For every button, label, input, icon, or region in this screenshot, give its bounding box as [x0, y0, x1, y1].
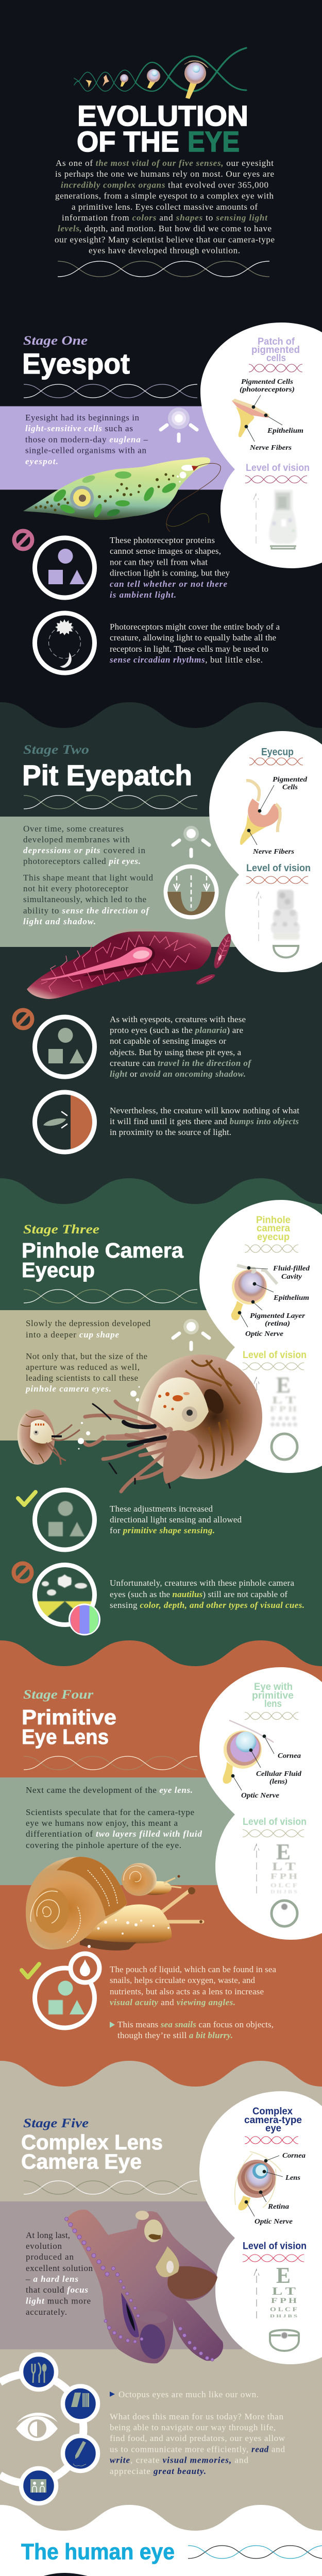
diagram labels: Nerve Fibers: [252, 848, 294, 855]
stage heading: Pit Eyepatch: [22, 759, 192, 791]
text: photoreceptor proteins: nor can they tell from what: [110, 557, 208, 567]
band text: single-celled organisms with an: [25, 445, 146, 455]
diagram labels: (retina): [265, 1319, 290, 1327]
band text: light much more: [26, 2296, 91, 2306]
bubble: eye diagram: Pinhole: [256, 1215, 291, 1226]
text: proto eyes: [110, 1014, 252, 1079]
icon: planarian avoiding shadow: [35, 1092, 95, 1152]
level of vision: D H J B S: [270, 1889, 297, 1894]
band: [0, 1310, 242, 1440]
level of vision: L T: [272, 2285, 296, 2297]
band text: Eyesight had its beginnings in: [25, 413, 139, 422]
bubble title: [251, 336, 300, 364]
stage heading: Complex Lens: [21, 2130, 163, 2154]
band: [0, 2201, 242, 2349]
band text: into a deeper cup shape: [26, 1330, 119, 1340]
intro text: eyes have developed through evolution.: [89, 246, 240, 256]
diagram labels: [245, 1264, 310, 1337]
illustration: human eye: [0, 2573, 151, 2576]
panel: stage one: [0, 323, 322, 673]
band text: eye we humans now enjoy, this meant a: [26, 1818, 178, 1828]
bubble: eye diagram: [199, 1200, 322, 1473]
band text: excellent solution: [26, 2263, 93, 2273]
text: proto eyes: As with eyespots, creatures with these: [110, 1014, 246, 1024]
text: what this means: What does this mean for us today? More than: [110, 2412, 283, 2421]
text: circadian: sense circadian rhythms, but little else.: [109, 655, 263, 665]
stage heading: Eyespot: [22, 347, 130, 380]
text: adjustments: directional light sensing and allowed: [110, 1515, 242, 1524]
band text: [25, 2230, 93, 2317]
level of vision: L T: [272, 1395, 296, 1406]
band text: leading scientists to call these: [26, 1373, 138, 1383]
text: pouch of liquid: nutrients, but also acts as a lens to increase: [110, 1987, 264, 1996]
icon: blurry shapes: [35, 1490, 95, 1550]
big snail: [26, 1857, 202, 1951]
band text: light and shadow.: [23, 917, 96, 926]
diagram: complex eye: [235, 2151, 283, 2216]
band text: Slowly the depression developed: [26, 1318, 150, 1328]
diagram labels: Retina: [267, 2202, 289, 2210]
intro text: a primitive lens. Eyes collect massive amounts of: [72, 202, 258, 212]
diagram labels: Fluid-filled: [273, 1264, 310, 1272]
text: circadian: Photoreceptors might cover the entire body of a: [110, 622, 280, 632]
diagram labels: Pigmented Cells: [241, 378, 293, 385]
text: unfortunately: Unfortunately, creatures with these pinhole camera: [110, 1578, 294, 1588]
text: circadian: [109, 622, 280, 665]
bubble: eye diagram: [200, 323, 322, 568]
icon: not capable: [14, 1010, 32, 1028]
diagram labels: Nerve Fibers: [249, 444, 292, 451]
bubble: eye diagram: eyecup: [257, 1232, 290, 1243]
panel: stage three: [0, 1200, 322, 1635]
diagram labels: Cavity: [281, 1273, 302, 1280]
band text: eyespot.: [25, 456, 58, 466]
icon: eye: [16, 2413, 58, 2441]
band text: simultaneously, which led to the: [23, 894, 146, 904]
text: circadian: creature, allowing light to equally bathe all the: [110, 633, 276, 642]
band text: Next came the development of the eye lens.: [26, 1785, 193, 1795]
panel: stage two: [0, 731, 322, 1152]
text: what this means: Octopus eyes are much like our own.: [118, 2389, 259, 2399]
band text: those on modern-day euglena –: [25, 435, 148, 444]
diagram labels: [240, 378, 303, 451]
text: adjustments: for primitive shape sensing.: [110, 1526, 215, 1535]
bubble: eye diagram: primitive: [252, 1690, 294, 1701]
level of vision: E: [276, 1372, 291, 1398]
text: nevertheless: Nevertheless, the creature will know nothing of what: [110, 1106, 299, 1115]
icon: focused shapes with liquid pouch: [35, 1954, 99, 2028]
band text: Scientists speculate that for the camera-type: [26, 1807, 194, 1817]
bubble: eye diagram: camera: [257, 1223, 290, 1234]
diagram labels: Cellular Fluid: [256, 1770, 301, 1777]
band: [0, 1777, 242, 1885]
text: what this means: write, create visual memories, and: [110, 2455, 248, 2465]
icon: not capable: [13, 1563, 32, 1582]
stage heading: Stage Three: [23, 1223, 99, 1236]
text: proto eyes: objects. But by using these pit eyes, a: [110, 1047, 241, 1057]
icon: pit with light rays: [166, 867, 216, 917]
icon: helix with evolving eyes: [74, 48, 246, 91]
text: photoreceptor proteins: can tell whether or not there: [110, 579, 227, 589]
intro text: incredibly complex organs that evolved over 365,000: [61, 180, 268, 190]
stage heading: Stage Five: [23, 2116, 89, 2130]
level of vision: [243, 1817, 307, 1926]
panel: stage four: [0, 1667, 322, 2040]
intro text: [55, 158, 275, 256]
band text: pinhole camera eyes.: [25, 1384, 111, 1394]
diagram labels: Cells: [282, 783, 298, 791]
band text: [25, 413, 148, 466]
bubble: eye diagram: camera-type: [244, 2115, 302, 2126]
stage heading: Stage One: [23, 334, 88, 348]
diagram labels: Optic Nerve: [255, 2217, 293, 2225]
text: proto eyes: creature can travel in the direction of: [110, 1058, 252, 1068]
icon: light source: [173, 826, 209, 856]
diagram labels: Optic Nerve: [241, 1791, 279, 1799]
text: photoreceptor proteins: These photoreceptor proteins: [110, 535, 215, 545]
bubble: eye diagram: Complex: [252, 2106, 293, 2117]
bubble: eye diagram: Eyecup: [261, 747, 294, 758]
text: pouch of liquid: snails, helps circulate oxygen, waste, and: [110, 1975, 256, 1985]
diagram: what vision enables: [0, 2354, 98, 2503]
bubble: eye diagram: eye: [265, 2123, 281, 2134]
stage heading: [22, 1688, 197, 1770]
text: unfortunately: [110, 1578, 304, 1610]
level of vision: E: [276, 1839, 291, 1865]
intro text: generations, from a simple eyespot to a complex eye with: [55, 191, 274, 201]
band text: that could focus: [26, 2285, 88, 2295]
bubble title: Patch of: [258, 336, 295, 347]
band: [0, 817, 242, 947]
diagram labels: Optic Nerve: [245, 1330, 283, 1337]
level of vision: O L C F: [270, 1882, 297, 1889]
text: nevertheless: in proximity to the source of light.: [110, 1127, 231, 1137]
diagram labels: Epithelium: [267, 427, 303, 434]
text: what this means: [110, 2389, 285, 2476]
band text: light-sensitive cells such as: [25, 423, 133, 433]
icon: not capable: [14, 531, 32, 549]
icon: cutlery: [21, 2354, 56, 2389]
band text: depressions or pits covered in: [23, 845, 145, 855]
heading: [21, 2539, 322, 2565]
text: adjustments: [110, 1504, 242, 1535]
icon: light source: [173, 1319, 209, 1349]
text: photoreceptor proteins: [110, 535, 230, 600]
text: nevertheless: it will find until it gets there and bumps into objects: [110, 1116, 299, 1126]
text: pouch of liquid: This means sea snails can focus on objects,: [117, 2020, 274, 2029]
stage heading: Pinhole Camera: [22, 1239, 184, 1262]
level of vision: O L C F: [270, 2306, 297, 2313]
text: what this means: us to communicate more efficiently, read and: [110, 2444, 285, 2454]
band text: [26, 1785, 202, 1850]
panel: the human eye: [0, 2539, 322, 2576]
icon: check: [22, 1964, 39, 1977]
level of vision: [243, 2241, 307, 2351]
band text: accurately.: [26, 2307, 67, 2317]
icon: shapes: [35, 1017, 95, 1077]
level of vision: Level of vision: [243, 1817, 307, 1827]
diagram: eye with primitive lens: [223, 1720, 274, 1790]
diagram labels: [252, 775, 307, 855]
level of vision: L T: [272, 1860, 296, 1873]
band text: covering the pinhole aperture of the eye.: [26, 1840, 181, 1850]
text: what this means: appreciate great beauty.: [110, 2466, 206, 2476]
text: photoreceptor proteins: is ambient light.: [110, 590, 176, 600]
text: pouch of liquid: though they’re still a bit blurry.: [117, 2030, 233, 2040]
stage heading: Primitive: [22, 1705, 116, 1729]
diagram labels: [241, 1752, 301, 1799]
diagram labels: Pigmented Layer: [250, 1312, 306, 1319]
band text: evolution: [26, 2241, 62, 2251]
level of vision: [245, 463, 310, 549]
level of vision: [243, 1350, 307, 1460]
diagram: eyecup: [240, 781, 281, 845]
text: photoreceptor proteins: cannot sense images or shapes,: [110, 546, 221, 556]
text: proto eyes: proto eyes (such as the planaria) are: [110, 1025, 243, 1035]
bubble title: cells: [266, 353, 286, 364]
head: [149, 1377, 209, 1431]
diagram labels: Pigmented: [273, 775, 307, 783]
band text: Over time, some creatures: [23, 824, 124, 834]
band text: [25, 1318, 150, 1394]
bubble title: pigmented: [251, 345, 300, 355]
text: pouch of liquid: visual acuity and viewing angles.: [110, 1997, 235, 2007]
diagram labels: [255, 2151, 306, 2225]
band text: This shape meant that light would: [23, 873, 154, 883]
band text: Not only that, but the size of the: [26, 1351, 147, 1361]
small snail: [122, 1863, 181, 1896]
icon: light source: [161, 408, 197, 441]
bubble: eye diagram: [199, 2091, 322, 2364]
band text: photoreceptors called pit eyes.: [23, 856, 141, 866]
band text: At long last,: [26, 2230, 70, 2240]
icon: check: [18, 1492, 36, 1505]
band text: – a hard lens: [25, 2274, 78, 2284]
diagram labels: (lens): [269, 1777, 287, 1785]
text: what this means: being able to navigate our way through life,: [110, 2422, 276, 2432]
level of vision: D H J B S: [270, 2314, 298, 2318]
title: [77, 99, 248, 158]
band text: ability to sense the direction of: [23, 906, 150, 916]
text: unfortunately: sensing color, depth, and other types of visual cues.: [110, 1600, 304, 1610]
stage heading: Eye Lens: [22, 1725, 109, 1749]
diagram: eyecup: [231, 1265, 277, 1327]
stage heading: [22, 1223, 197, 1303]
band text: not hit every photoreceptor: [23, 884, 128, 893]
small nautilus: [15, 1408, 80, 1466]
level of vision: F P H: [270, 1405, 297, 1414]
title: EVOLUTION: [77, 99, 248, 132]
icon: shapes: [35, 538, 95, 598]
illustration: euglena: [23, 457, 221, 532]
stage heading: Eyecup: [22, 1258, 95, 1282]
intro text: our eyesight? Many scientist believe that our camera-type: [55, 234, 275, 244]
level of vision: Level of vision: [243, 2241, 307, 2251]
heading: The human eye: [21, 2539, 175, 2565]
band text: aperture was reduced as well,: [26, 1362, 140, 1372]
diagram: pigmented patch: [232, 395, 282, 442]
stage heading: Camera Eye: [21, 2149, 142, 2173]
band text: differentiation of two layers filled with fluid: [26, 1829, 202, 1839]
illustration: planaria: [27, 928, 234, 999]
text: what this means: find food, and avoid predators, our eyes allow: [110, 2433, 285, 2443]
band text: produced an: [26, 2252, 74, 2262]
icon: books: [63, 2386, 98, 2421]
title: OF THE: [77, 125, 179, 158]
icon: blurry landscape with colour swatch: [31, 1565, 100, 1635]
bubble: eye diagram: [209, 731, 322, 972]
stage heading: Stage Four: [23, 1688, 93, 1702]
level of vision: Level of vision: [246, 463, 310, 473]
level of vision: F P H: [270, 1872, 298, 1881]
text: pouch of liquid: [110, 1964, 276, 2040]
text: pouch of liquid: The pouch of liquid, which can be found in sea: [110, 1964, 276, 1974]
bubble: eye diagram: Eye with: [254, 1682, 293, 1692]
level of vision: Level of vision: [243, 1350, 307, 1361]
big shell: [138, 1354, 262, 1479]
text: photoreceptor proteins: direction light is coming, but they: [110, 568, 230, 578]
band text: [23, 824, 154, 926]
stage heading: Stage Two: [23, 743, 89, 757]
diagram labels: Epithelium: [273, 1294, 309, 1301]
stage heading: [22, 743, 197, 809]
title: EYE: [188, 125, 240, 158]
stage heading: [22, 334, 197, 398]
bubble: eye diagram: [199, 1667, 322, 1940]
text: nevertheless: [110, 1106, 299, 1137]
level of vision: [246, 863, 311, 957]
tentacles: [84, 1401, 188, 1492]
text: adjustments: These adjustments increased: [110, 1504, 213, 1514]
icon: circadian: [35, 613, 95, 673]
diagram labels: Lens: [285, 2174, 300, 2181]
text: proto eyes: light or avoid an oncoming shadow.: [110, 1069, 246, 1079]
panel: stage five: [0, 2091, 322, 2503]
intro text: information from colors and shapes to sensing light: [62, 213, 268, 223]
icon: five evolving eyes: [86, 61, 208, 99]
diagram labels: (photoreceptors): [240, 385, 295, 393]
bubble: eye diagram: lens: [264, 1699, 282, 1709]
diagram labels: Cornea: [278, 1752, 301, 1759]
band text: developed membranes with: [23, 835, 130, 844]
intro text: is perhaps the one we humans rely on most. Our eyes are: [55, 169, 274, 179]
stage heading: [21, 2116, 197, 2194]
purple band: [0, 406, 237, 489]
text: circadian: receptors in light. These cells may be used to: [110, 644, 268, 654]
intro text: As one of the most vital of our five senses, our eyesight: [56, 158, 274, 168]
level of vision: F P H: [271, 2297, 297, 2305]
icon: pen: [63, 2436, 98, 2471]
intro text: levels, depth, and motion. But how did we come to have: [58, 224, 272, 233]
illustration: snails: [26, 1857, 202, 1951]
diagram labels: Cornea: [282, 2151, 306, 2159]
text: proto eyes: not capable of sensing images or: [110, 1036, 226, 1046]
level of vision: E: [276, 2263, 291, 2288]
panel: header: [55, 48, 275, 277]
text: unfortunately: eyes (such as the nautilus) still are not capable of: [110, 1589, 287, 1599]
level of vision: Level of vision: [246, 863, 311, 874]
icon: photo: [21, 2468, 56, 2503]
illustration: nautilus: [15, 1354, 262, 1492]
illustration: octopus: [65, 2210, 223, 2363]
